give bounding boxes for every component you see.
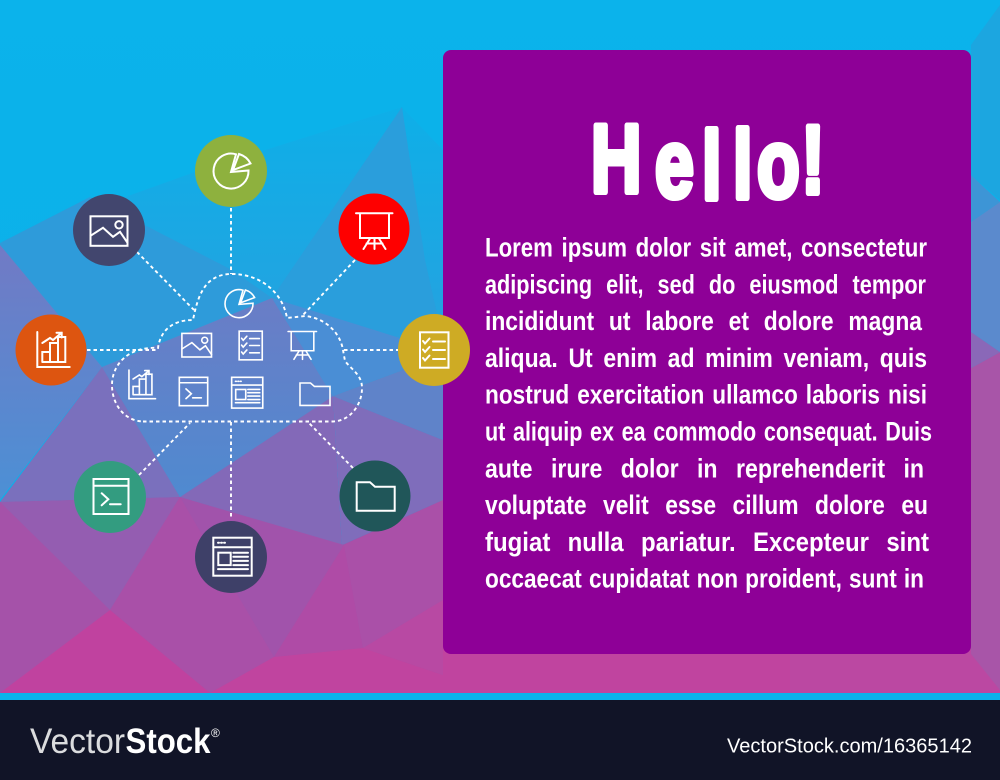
footer logo: VectorStock: Vector (30, 722, 125, 761)
footer logo: VectorStock (30, 722, 220, 761)
body text block: nostrud exercitation ullamco laboris nisi (485, 380, 927, 410)
icon: folder circle (340, 460, 410, 532)
footer logo: VectorStock: ® (211, 726, 220, 740)
heading: Hello!: Hello! (591, 104, 825, 220)
body text block: aute irure dolor in reprehenderit in (485, 453, 924, 483)
body text block: occaecat cupidatat non proident, sunt in (485, 564, 924, 594)
cloud icon: bar chart (129, 370, 156, 399)
icon: checklist circle (398, 314, 470, 386)
connectors: dashed lines from cloud to circles (87, 208, 398, 519)
panel: purple text panel (443, 50, 971, 654)
footer bar (0, 693, 1000, 780)
body text block: voluptate velit esse cillum dolore eu (485, 490, 928, 520)
body text block (485, 232, 932, 594)
cloud icon: presentation board (288, 331, 317, 359)
body text block: aliqua. Ut enim ad minim veniam, quis (485, 343, 927, 373)
cloud icon: folder (300, 383, 330, 405)
icon: presentation board circle (338, 194, 410, 264)
icon: terminal circle (74, 461, 146, 533)
cloud: dashed outline with icons (112, 274, 362, 422)
cloud icon: checklist (239, 331, 262, 360)
cloud icon: terminal (179, 377, 208, 406)
footer logo: VectorStock: Stock (126, 722, 211, 761)
icon: bar chart circle (16, 314, 86, 386)
icon: image circle (73, 194, 145, 266)
cloud icon: image (182, 333, 212, 357)
body text block: incididunt ut labore et dolore magna (485, 306, 923, 336)
body text block: fugiat nulla pariatur. Excepteur sint (485, 527, 929, 557)
cloud icon: pie chart (225, 290, 255, 318)
icon: pie chart circle (195, 135, 267, 207)
icon: web page circle (195, 521, 267, 593)
footer image id: VectorStock.com/16365142 (727, 736, 972, 758)
cloud icon: web page (232, 377, 263, 408)
